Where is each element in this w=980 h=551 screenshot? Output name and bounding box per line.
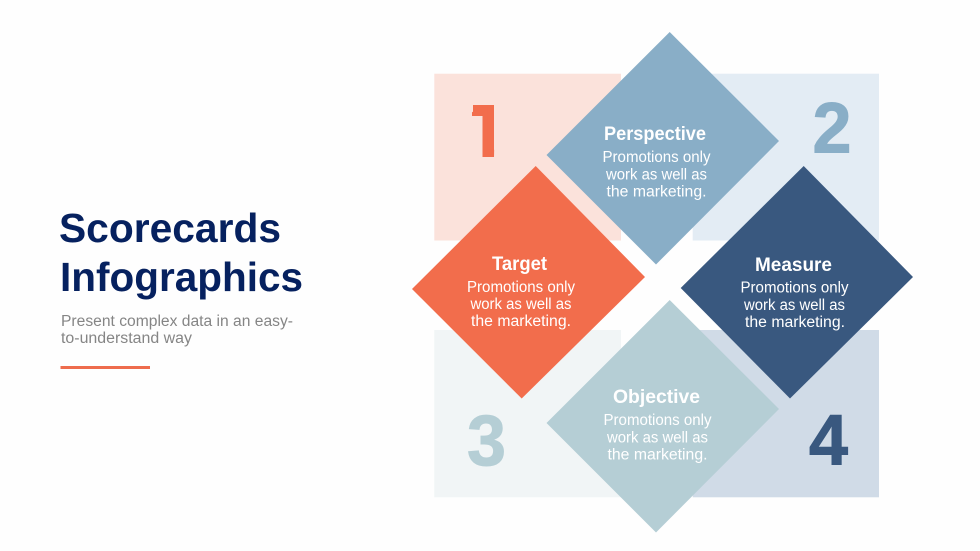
number 2: 2 — [812, 90, 852, 168]
diamond: Target: the marketing. — [471, 313, 571, 330]
diamond: Measure: Promotions only — [740, 280, 849, 296]
diamond: Objective: the marketing. — [608, 446, 708, 464]
accent underline — [60, 366, 150, 369]
title: Infographics — [60, 254, 303, 300]
subtitle — [61, 313, 293, 347]
panel 4 background — [693, 330, 879, 497]
diamond: Objective: Promotions only — [604, 412, 712, 429]
panel 1 background — [434, 74, 621, 240]
diamond: Objective: work as well as — [606, 430, 708, 446]
panel 3 background — [434, 330, 621, 497]
diamond: Measure: work as well as — [743, 297, 845, 314]
infographic canvas — [60, 32, 913, 532]
diamond: Target: work as well as — [470, 296, 572, 313]
number 3: 3 — [467, 402, 506, 481]
diamond: Objective: Objective — [613, 387, 700, 408]
title: Scorecards — [59, 205, 281, 251]
subtitle: to-understand way — [61, 330, 192, 347]
diamond: Perspective: work as well as — [605, 166, 707, 184]
diamond: Perspective: the marketing. — [606, 184, 706, 200]
diamond: Perspective — [546, 32, 779, 264]
diamond: Target — [412, 166, 645, 398]
diamond: Perspective: Perspective — [604, 124, 706, 145]
diamond: Target: Promotions only — [467, 279, 575, 296]
number 1 — [472, 105, 494, 157]
diamond: Measure — [681, 166, 913, 398]
diamond: Objective — [546, 300, 779, 532]
subtitle: Present complex data in an easy- — [61, 313, 293, 330]
panel 2 background — [693, 74, 879, 240]
title — [59, 205, 303, 300]
diamond: Measure: the marketing. — [745, 314, 845, 331]
diamond: Measure: Measure — [755, 255, 832, 276]
diamond: Target: Target — [492, 254, 548, 275]
number 4: 4 — [809, 402, 848, 480]
diamond: Perspective: Promotions only — [602, 149, 711, 166]
number 1: 1 — [462, 94, 501, 173]
